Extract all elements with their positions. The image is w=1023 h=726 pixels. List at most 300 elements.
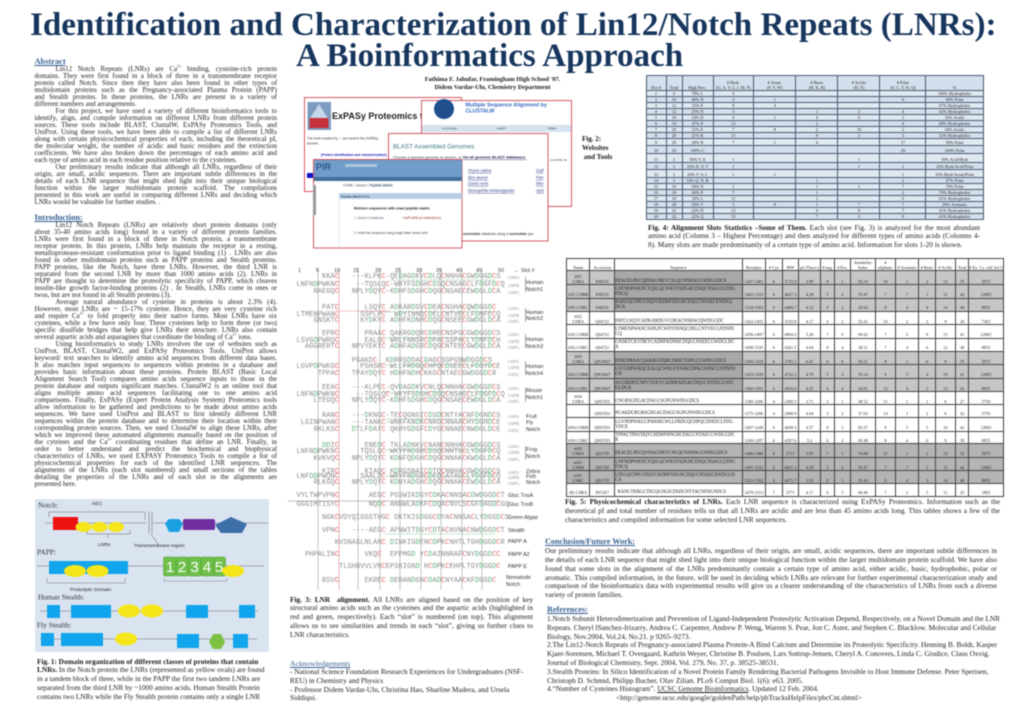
figure 4: slot statistics table: 3 — [673, 172, 675, 177]
figure 5: physicochemical table: 6 — [773, 332, 775, 337]
figure 3: LNR alignment: LNRC — [508, 456, 519, 462]
slot numbers: 1 — [298, 268, 301, 274]
figure 4: slot statistics table: 3 — [902, 115, 904, 120]
figure 5: physicochemical table: 15 — [943, 332, 948, 337]
figure 4: slot statistics table: 13 — [731, 208, 735, 213]
figure 5: physicochemical table: 1481-1522 — [745, 465, 763, 470]
figure 5: physicochemical table: 2 — [906, 490, 908, 495]
figure 3: LNR alignment: RANC ---DKNGC-TECQGNGICDSDCNTYACNFDGNDCS — [322, 412, 500, 420]
figure 5: physicochemical table: 7 — [773, 490, 775, 495]
figure 5: physicochemical table: Q9UM47 — [594, 386, 611, 391]
figure 5: physicochemical table: 6 — [773, 465, 775, 470]
figure 5: physicochemical table: hN4 LNRB — [568, 425, 588, 430]
figure 5: physicochemical table: 8 — [826, 478, 829, 483]
figure 5: physicochemical table: 4 — [906, 386, 908, 391]
figure 4: slot statistics table: 1 — [732, 172, 734, 177]
figure 5: physicochemical table: 7 — [906, 292, 908, 297]
figure 4: slot statistics table: 6 — [858, 115, 860, 120]
text: Notch2 — [526, 316, 543, 322]
figure 5: physicochemical table: # Basic — [921, 265, 933, 270]
figure 5: physicochemical table: P07207 — [596, 490, 609, 495]
figure 5: physicochemical table: 8855 — [982, 478, 990, 483]
figure 4: slot statistics table: 13 — [654, 172, 658, 177]
figure 3: LNR alignment: LNRB — [508, 282, 519, 288]
figure 4: slot statistics table: 1 — [816, 202, 818, 207]
figure 5: physicochemical table: 4616.0 — [785, 386, 796, 391]
screenshot: clustalw: CLUSTALW — [466, 108, 495, 114]
figure 5: physicochemical table: Residues — [746, 265, 762, 270]
figure 4: slot statistics table: 4 — [816, 208, 818, 213]
figure 4: slot statistics table: 5 — [732, 109, 734, 114]
figure 4: slot statistics table: 9 — [902, 214, 904, 219]
figure 5: physicochemical table: 3 — [926, 478, 928, 483]
text block: introduction: aligns multiple amino acid sequences facilitating one to one amino acid — [34, 389, 277, 397]
figure 5: physicochemical table: AGGRERTCNPVYEKYCADHFADGRCDQGCNTEECGWD — [615, 381, 733, 386]
notch domain row: Notch: — [38, 500, 58, 510]
figure 5: physicochemical table: 69.48 — [858, 438, 868, 443]
figure 4: slot statistics table: 4 — [902, 109, 904, 114]
figure 4: slot statistics table: % — [953, 85, 957, 90]
slot numbers: 45 — [476, 268, 482, 274]
figure 5: physicochemical table: 5 — [826, 372, 829, 377]
figure 3 caption: structural amino acids such as the cysteines and the aspartic acids (highlighted in — [290, 603, 533, 612]
figure 4: slot statistics table: (S, C, T, N, Q) — [890, 85, 916, 90]
figure 5: physicochemical table: 1865 — [982, 490, 990, 495]
figure 4: slot statistics table: 33% D, Y, T — [687, 164, 708, 169]
figure 5: physicochemical table: mN1 — [574, 460, 582, 465]
screenshot: clustalw — [422, 99, 572, 206]
figure 5: physicochemical table: 3771 — [786, 490, 795, 495]
figure 5: physicochemical table: 1 — [906, 411, 908, 416]
text: Notch3 — [526, 344, 543, 350]
figure 4: slot statistics table: 29 — [672, 127, 676, 132]
figure 5: physicochemical table: 6 — [926, 345, 928, 350]
figure 4: slot statistics table: 7 — [732, 190, 734, 195]
figure 5: physicochemical table: 1479-1513 — [745, 490, 763, 495]
figure 5: physicochemical table: hN2 LNRC — [568, 345, 588, 350]
text block: introduction: alignments of the LNRs (each slot numbered) and small sections of the tables — [34, 466, 277, 474]
figure 4: slot statistics table: 49% N — [691, 97, 704, 102]
figure 5: physicochemical table: 35 — [960, 359, 964, 364]
figure 5 caption: Fig. 5: Physicochemical characteristics of LNRs. Each LNR sequence is characterized using ExPASy Proteomics. Information such as the — [565, 497, 1000, 506]
slot numbers: 10 — [334, 268, 340, 274]
figure 5: physicochemical table: 4 — [906, 345, 908, 350]
figure 5: physicochemical table: 4 — [773, 399, 775, 404]
figure 5: physicochemical table: 11 — [943, 490, 948, 495]
text block: references: 1.Notch Subunit Heterodimerization and Prevention of Ligand-Independent Proteolytic Activation Depend, Respectively, on a Novel Domain and the LNR — [547, 614, 1000, 623]
text: Human — [526, 336, 543, 342]
figure 5: physicochemical table: 5.26 — [806, 332, 813, 337]
figure 4: slot statistics table: 7 — [732, 140, 734, 145]
figure 5: physicochemical table: 8855 — [982, 438, 990, 443]
figure 4: slot statistics table: 4 — [774, 103, 776, 108]
text block: references: 3.Stealth Proteins: In Silico Identification of a Novel Protein Family Rendering Bacterial Pathogens Invisible to Host Immune Defense. Peter Sperisen, — [547, 667, 988, 676]
human stealth row — [38, 592, 258, 618]
papp domain row: 5 — [215, 559, 223, 576]
figure 5: physicochemical table: LNRA — [572, 359, 584, 364]
figure 4: slot statistics table: 33% Acidic — [945, 115, 965, 120]
text: Notch1 — [526, 286, 543, 292]
figure 5: physicochemical table: 0 — [841, 332, 844, 337]
figure 5: physicochemical table: 13 — [943, 451, 948, 456]
figure 3: LNR alignment: LNRA — [508, 386, 519, 390]
figure 5: physicochemical table: 69.21 — [858, 359, 868, 364]
figure 4: slot statistics table: 3 — [673, 178, 675, 183]
figure 4: slot statistics table: 7 — [816, 214, 818, 219]
figure 5: physicochemical table: 5 — [926, 490, 928, 495]
text block: introduction: allow information to be gathered and predictions to be made about amino acids — [34, 403, 277, 411]
figure 4: slot statistics table: 1 — [902, 172, 904, 177]
figure 3: LNR alignment: RSVC EKREC DERANDGNCDADCNYAACKFDGGDC — [322, 576, 496, 584]
figure 3: LNR alignment: LNRB — [508, 338, 519, 344]
figure 3: LNR alignment: LNFNDPWKNC --TQSLQC-WKYFSDGHCDSQCNSAGCLFDGFDCQ — [296, 280, 505, 288]
figure 5: physicochemical table: 25.43 — [858, 478, 868, 483]
figure 2 label: Fig. 2: Websites and Tools — [582, 135, 612, 161]
figure 4: slot statistics table: 2 — [902, 178, 904, 183]
figure 5: physicochemical table: 12865 — [981, 425, 991, 430]
author line: Didem Vardar-Ulu, Chemistry Department — [435, 84, 550, 90]
figure 5: physicochemical table: 3 — [926, 386, 928, 391]
alignment guide lines — [288, 268, 500, 590]
figure 5: physicochemical table: Q9UM47 — [594, 359, 611, 364]
figure 5: physicochemical table: 6 — [926, 359, 928, 364]
figure 5: physicochemical table: 6 — [773, 386, 775, 391]
figure 1 caption: LNRs. In the Notch protein the LNRs (represented as yellow ovals) are found — [37, 665, 265, 674]
figure 5: physicochemical table: 20.63 — [858, 305, 868, 310]
figure 3: LNR alignment: LNRA — [508, 274, 519, 280]
figure 4: slot statistics table: # Acidic — [852, 80, 866, 85]
figure 5: physicochemical table: 6 — [826, 438, 829, 443]
figure 5: physicochemical table: 6 — [841, 359, 844, 364]
figure 4: slot statistics table — [645, 74, 985, 221]
title — [30, 7, 997, 74]
figure 4: slot statistics table: 6 — [902, 196, 904, 201]
figure 5: physicochemical table: 2 — [926, 411, 928, 416]
figure 4: slot statistics table: 7 — [902, 184, 904, 189]
figure 5: physicochemical table: 4.35 — [806, 386, 813, 391]
figure 5: physicochemical table: 27 — [960, 399, 964, 404]
alignment group labels — [506, 276, 544, 588]
figure 4: slot statistics table: 6 — [655, 121, 657, 126]
alignment group labels: Fruit — [526, 414, 537, 420]
figure 4: slot statistics table: 33% L — [692, 196, 703, 201]
alignment group labels: Frog — [526, 446, 537, 452]
figure 5: physicochemical table: 8855 — [982, 386, 990, 391]
text block: abstract: identify, align, and compile information on different LNRs from different protein — [34, 114, 277, 122]
figure 4: slot statistics table: 33% Hydr/Acid/Polar — [936, 164, 974, 169]
papp domain row: 1 — [166, 559, 174, 576]
figure 5: physicochemical table: 12865 — [981, 332, 991, 337]
text block: abstract: protein called Notch. Since then they have also been found in other types of — [34, 79, 277, 87]
figure 4: slot statistics table: 7 — [655, 127, 657, 132]
figure 4: slot statistics table: 59% Polar — [946, 140, 964, 145]
text block: introduction: provides basic information about these proteins. Protein BLAST (Basic Local — [34, 368, 277, 376]
figure 4: slot statistics table: (G, A, V, L, I, M, P) — [716, 85, 751, 90]
screenshot: pir peptide match — [313, 160, 462, 248]
figure 3: LNR alignment: LGINPWANC ---TANKC-WNKFKNDKCNRGCNNAACHYDGHDCE — [301, 418, 500, 426]
figure 5: physicochemical table: CNGRSGDGACDAGCSGPGNWDGGDCS — [615, 399, 699, 404]
figure 3: LNR alignment: EEAC ---KLPEC-QVDAGDKVCNLQCNNHACGWDGGDCS — [322, 384, 500, 392]
figure 5: physicochemical table: 41 — [960, 332, 964, 337]
figure 4: slot statistics table: 25% N — [691, 109, 704, 114]
text block: introduction: twos, but are not found in all Stealth proteins (3). — [34, 291, 171, 299]
figure 5: physicochemical table: 5 — [826, 465, 829, 470]
figure 5: physicochemical table: R — [615, 438, 618, 443]
figure 5: physicochemical table: 6 — [944, 399, 947, 404]
alignment group labels: PAPP E — [508, 564, 527, 570]
figure 5: physicochemical table: Q9STD3 — [595, 438, 610, 443]
figure 5: physicochemical table: 2 — [926, 279, 928, 284]
figure 4: slot statistics table: 60% Polar — [946, 97, 964, 102]
text block: abstract: details of each LNR sequence that might shed light into their unique biological — [34, 177, 277, 185]
figure 3: LNR alignment: LNRC — [508, 290, 519, 294]
figure 5: physicochemical table: 52.41 — [858, 319, 868, 324]
figure 5: physicochemical table: 3717 — [786, 451, 795, 456]
figure 5: physicochemical table: Q9STD3 — [595, 425, 610, 430]
papp domain row: 4 — [203, 559, 211, 576]
figure 5: physicochemical table: CA — [615, 478, 622, 483]
figure 4: slot statistics table: 6 — [902, 97, 904, 102]
figure 5: physicochemical table: 42 — [960, 425, 964, 430]
figure 5: physicochemical table: 4.64 — [806, 345, 813, 350]
figure 5: physicochemical table: 4.04 — [806, 411, 813, 416]
figure 4: slot statistics table: # Hydr. — [727, 80, 740, 85]
screenshot: expasy — [304, 98, 462, 192]
figure 5: physicochemical table: 1422-1455 — [745, 319, 763, 324]
figure 5: physicochemical table: 39 — [960, 438, 964, 443]
text: Notch — [526, 426, 540, 432]
figure 1: domain organization diagram — [34, 498, 270, 652]
notch domain row: Transmembrane region — [134, 543, 185, 549]
figure 5: physicochemical table: 4722.2 — [785, 372, 796, 377]
figure 5: physicochemical table: Q01705 — [595, 451, 609, 456]
screenshot: pir peptide match: HOME / Search / Peptide Match — [343, 184, 393, 188]
figure 4: slot statistics table: 22% D — [691, 208, 704, 213]
figure 4: slot statistics table: 67% Polar — [946, 178, 964, 183]
figure 4: slot statistics table: 12 — [654, 164, 658, 169]
figure 3: LNR alignment: LNRC — [508, 344, 519, 350]
figure 5: physicochemical table: 90.62 — [858, 332, 868, 337]
figure 5: physicochemical table: 92.14 — [858, 279, 868, 284]
figure 4: slot statistics table: 1 — [816, 178, 818, 183]
figure 5: physicochemical table: 8 — [884, 359, 887, 364]
figure 5: physicochemical table: 1180-1206 — [745, 399, 763, 404]
figure 5: physicochemical table: 2 — [841, 305, 844, 310]
figure 5: physicochemical table: Q01705 — [595, 478, 609, 483]
figure 3: LNR alignment: LGVPDPWKGC PSHSRC WLLFRDGQCHPQCDSEECLFDGYDCE — [296, 362, 500, 370]
figure 3: LNR alignment: VPNC ----AEGC APNWITDGYCDTACNVNACNWDGGDCT — [322, 526, 505, 534]
figure 5: physicochemical table: 60.46 — [858, 490, 868, 495]
figure 5: physicochemical table: 12865 — [981, 465, 991, 470]
figure 4: slot statistics table: 8 — [816, 133, 818, 138]
figure 5: physicochemical table: 38.11 — [858, 345, 868, 350]
figure 4: slot statistics table: 33% D — [691, 115, 704, 120]
text block: introduction: specific disulfide bridges that help give LNRs their structure. LNRs also contain — [34, 326, 277, 334]
figure 5: physicochemical table: 7365 — [982, 319, 990, 324]
figure 4: slot statistics table: 21% K — [691, 133, 704, 138]
figure 4: slot statistics table: 1 — [732, 164, 734, 169]
figure 3: LNR alignment: KKAC ---KLPKC-QEDAGDKVCDLQCNNHACGWDGGDCS — [322, 272, 500, 280]
figure 5: physicochemical table: 1 — [906, 279, 908, 284]
text block: introduction: sequences within the protein database and to determine their location within their — [34, 417, 277, 425]
figure 5: physicochemical table: 5875 — [982, 451, 990, 456]
text block: introduction: Alignment Search Tool) compares amino acids sequence inputs to those in the — [34, 375, 277, 383]
figure 4: slot statistics table: # Polar — [897, 80, 909, 85]
figure 5: physicochemical table: 5 — [906, 332, 908, 337]
figure 5: physicochemical table: 3510.8 — [785, 319, 796, 324]
figure 4: slot statistics table: 1 — [774, 140, 776, 145]
papp domain row: Proteolytic Domain — [70, 587, 111, 593]
figure 5: physicochemical table: GNSKTCKYDKYCADHFKDNHCDQGCNSEECGWDGLDC — [615, 340, 734, 345]
figure 4: slot statistics table: 100% Hydrophobic — [938, 91, 972, 96]
figure 4: slot statistics table: 31% F — [692, 103, 703, 108]
figure 5: physicochemical table: 3765.1 — [785, 359, 796, 364]
slot numbers: ← Slot # — [514, 268, 535, 274]
figure 1 caption: Fig. 1: Domain organization of different classes of proteins that contain — [37, 656, 258, 666]
figure 4: slot statistics table: # Arom. — [768, 80, 782, 85]
text block: introduction: Average natural abundance of cysteine in proteins is about 2.3% (4). — [56, 298, 277, 306]
figure 5: physicochemical table: 6 — [773, 305, 775, 310]
figure 5: physicochemical table: 12 — [943, 386, 948, 391]
figure 5: physicochemical table: 10 — [943, 372, 948, 377]
figure 4: slot statistics table: 50% V, E — [689, 157, 706, 162]
heading: abstract: Abstract — [34, 57, 66, 66]
figure 3: LNR alignment: LNRA — [508, 444, 519, 448]
figure 4: slot statistics table: 29 — [672, 140, 676, 145]
heading: references: References: — [547, 605, 588, 614]
figure 3: LNR alignment: PATC LSQYC ADKARDGVCDEACNSHACQWDGGDC — [322, 304, 496, 312]
figure 5: physicochemical table: 1 — [906, 451, 908, 456]
figure 3: LNR alignment: LNRC — [508, 372, 519, 376]
figure 5: physicochemical table: LNRC — [572, 478, 584, 483]
figure 5: physicochemical table: 5 — [841, 490, 844, 495]
figure 5: physicochemical table: 6 — [773, 319, 775, 324]
figure 5: physicochemical table: FDCQ — [615, 292, 628, 297]
figure 5: physicochemical table: 38 — [960, 345, 964, 350]
figure 5: physicochemical table: 11 — [943, 465, 948, 470]
text block: abstract: origin, are small, acidic sequences. There are important subtle differences in the — [34, 170, 277, 178]
text block: introduction: characteristics of LNRs, we used EXPASY Proteomics Tools to compile a list of — [34, 452, 277, 460]
figure 5: physicochemical table: hN1 — [574, 274, 582, 279]
figure 4: slot statistics table: 2 — [816, 121, 818, 126]
text block: acknowledgements: - National Science Foundation Research Experiences for Undergraduates (NSF- — [290, 667, 523, 676]
screenshot: pir peptide match: Peptide Match Form — [341, 194, 370, 198]
text block: conclusion: comparison of the bioinformatics data with experimental results will give us a clearer understanding of the characteristics of LNRs from such a diverse — [545, 581, 997, 590]
author line — [424, 76, 560, 92]
screenshot: blast: BLAST Assembled Genomes — [393, 144, 474, 150]
figure 5: physicochemical table: 10 — [883, 319, 888, 324]
figure 4: slot statistics table: 1 — [816, 196, 818, 201]
figure 4: slot statistics table: 1 — [774, 115, 776, 120]
figure 5: physicochemical table: LNFNDPWKNCTQSLQCWKYFSDGHCDSQCNSAGCLFDG — [615, 287, 735, 292]
figure 5: physicochemical table: 2 — [841, 411, 844, 416]
figure 3: LNR alignment: EPRC PRAAC QAKRGDQRCDRECNSPGCGWDGGDCS — [322, 330, 500, 338]
screenshot: pir peptide match: Retrieve sequences with exact peptide match — [354, 206, 429, 210]
figure 5: physicochemical table: 8 — [826, 425, 829, 430]
figure 4: slot statistics table: (F, Y, W) — [767, 85, 783, 90]
figure 5 caption: characteristics and compiled information for some selected LNR sequences. — [565, 515, 787, 524]
figure 4: slot statistics table: 8 — [858, 208, 860, 213]
figure 4: slot statistics table: 1 — [902, 164, 904, 169]
text: Mouse — [526, 388, 542, 394]
text block: abstract: multidomain proteins such as the Pregnancy-associated Plasma Protein (PAPP) — [34, 86, 277, 94]
figure 5: physicochemical table: 55.47 — [858, 292, 868, 297]
figure 5 caption: theoretical pI and total number of residues tells us that all LNRs are acidic and are less than 45 amino acids long. This tables shows a few of the — [565, 506, 1000, 515]
figure 4: slot statistics table: 7 — [902, 202, 904, 207]
figure 4: slot statistics table: 3 — [673, 164, 675, 169]
figure 5: physicochemical table: 32 — [960, 411, 964, 416]
figure 5: physicochemical table: 2 — [841, 292, 844, 297]
figure 5: physicochemical table: 6 — [773, 345, 775, 350]
figure 5: physicochemical table: 11 — [883, 399, 888, 404]
figure 4: slot statistics table: 67% Hydrophobic — [939, 103, 971, 108]
text: Human — [526, 280, 543, 286]
figure 5: physicochemical table: Name — [573, 265, 583, 270]
figure 5: physicochemical table: P46531 — [596, 279, 609, 284]
slot numbers: 35 — [436, 268, 442, 274]
figure 4: slot statistics table: 10 — [857, 127, 861, 132]
figure 4: slot statistics table: 2 — [816, 127, 818, 132]
figure 4: slot statistics table: 5 — [655, 115, 657, 120]
figure 4: slot statistics table: 47% P — [692, 121, 703, 126]
screenshot: clustalw: MAFFT — [497, 126, 507, 130]
figure 4: slot statistics table: 18 — [672, 115, 676, 120]
figure 5: physicochemical table: 4 — [906, 478, 908, 483]
figure 5: physicochemical table: 1384-1418 — [745, 359, 763, 364]
figure 4: slot statistics table: 78% L — [692, 91, 703, 96]
figure 4: slot statistics table: 1 — [816, 109, 818, 114]
figure 4: slot statistics table: 29 — [672, 148, 676, 153]
screenshot: blast: Drosophila melanogaster — [468, 188, 515, 193]
figure 5: physicochemical table: 4804.3 — [785, 332, 796, 337]
figure 4: slot statistics table: 29% Y — [692, 202, 703, 207]
figure 5: physicochemical table: A — [615, 345, 619, 350]
figure 3: LNR alignment: LTMENPWANC SSPLPC WDYINNQCDELCNTVECLFDNFECQ — [296, 310, 500, 318]
figure 4: slot statistics table: 9 — [655, 140, 657, 145]
figure 5: physicochemical table: 34 — [960, 319, 964, 324]
figure 5: physicochemical table: 35 — [960, 279, 964, 284]
figure 3: LNR alignment: LNRA — [508, 306, 519, 310]
figure 5: physicochemical table: 55.14 — [858, 372, 868, 377]
figure 5: physicochemical table: hN4 — [574, 394, 582, 399]
figure 5: physicochemical table: 4471.7 — [785, 478, 796, 483]
screenshot: clustalw: CLUSTAL W — [550, 158, 567, 162]
figure 4: slot statistics table: (D, E) — [854, 85, 864, 90]
figure 5: physicochemical table: 3.71 — [806, 399, 813, 404]
figure 4: slot statistics table: 33% Q, N, R — [686, 178, 709, 183]
figure 4: slot statistics table: 8 — [774, 202, 776, 207]
figure 5: physicochemical table: Q9UM47 — [594, 372, 611, 377]
figure 4: slot statistics table: 22% Q — [691, 214, 704, 219]
figure 5: physicochemical table: 1249-1287 — [745, 438, 763, 443]
title: Identification and Characterization of Lin12/Notch Repeats (LNRs): — [30, 7, 997, 43]
figure 5: physicochemical table: aliphatic — [878, 265, 893, 270]
screenshot: blast: nucleotide database using a nucleotide que — [463, 232, 534, 236]
figure 5: physicochemical table: 1460-1501 — [745, 386, 763, 391]
figure 5: physicochemical table: LNRA — [572, 279, 584, 284]
figure 5: physicochemical table: 8 — [884, 438, 887, 443]
figure 5: physicochemical table: hN3 — [574, 354, 582, 359]
figure 3: LNR alignment: RAEGQC NPLYDQYC-KDHFSDGHCDQGCNSAECEWDGLDCA — [313, 288, 500, 296]
figure 5: physicochemical table: 3 — [841, 372, 844, 377]
figure 5: physicochemical table: LGVPDPWKGCPSHSRCWLLFRDGQCHPQCDSEECLFDG — [615, 420, 733, 425]
figure 5: physicochemical table: 2 — [841, 465, 844, 470]
text block: introduction — [34, 221, 278, 488]
figure 5: physicochemical table: 4297.6 — [785, 438, 796, 443]
figure 5: physicochemical table: 7 — [884, 345, 887, 350]
figure 5: physicochemical table: mN1 — [574, 446, 582, 451]
figure 5: physicochemical table: 6 — [773, 478, 775, 483]
